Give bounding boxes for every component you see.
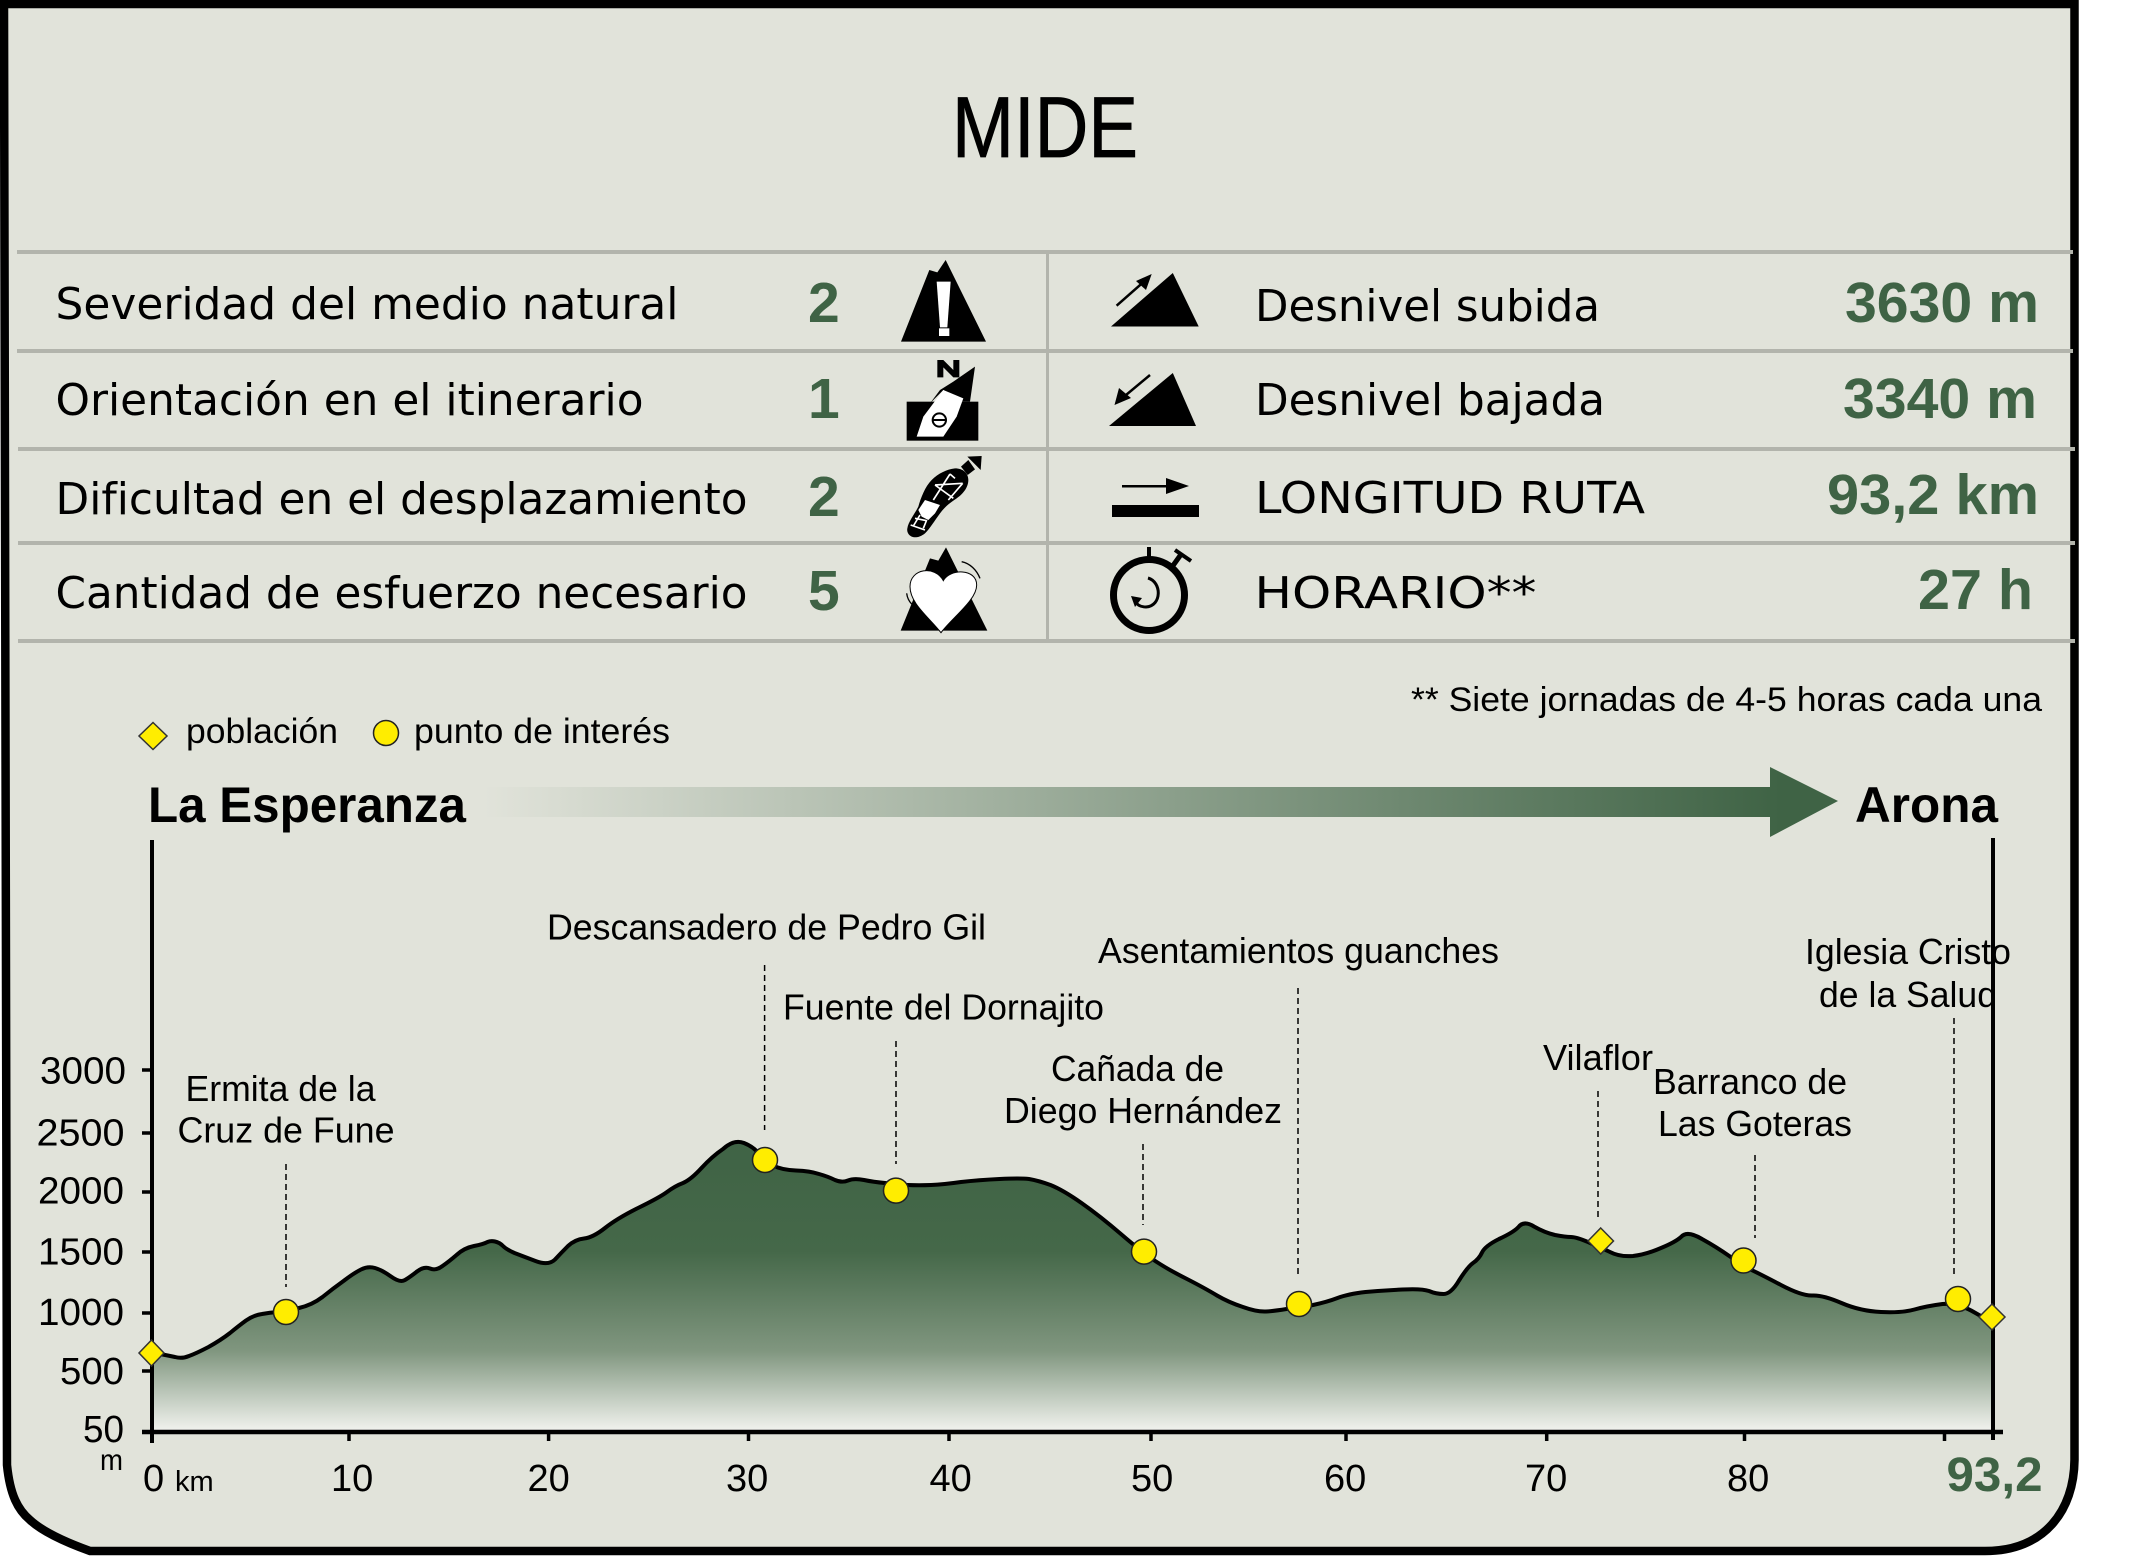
chart: elevation profile	[36, 838, 2042, 1502]
place labels: Fuente del Dornajito	[783, 986, 1104, 1028]
rating label: orientacion: Orientación en el itinerario	[56, 375, 644, 426]
title: MIDE	[952, 80, 1138, 176]
panel: MIDE ratings	[56, 260, 987, 633]
icon: heart on mountain	[901, 547, 987, 633]
y axis labels: m	[100, 1444, 123, 1477]
legend text: población: población	[186, 712, 338, 751]
rating value: cantidad: 5	[808, 559, 840, 623]
arrow: route direction	[471, 767, 1838, 837]
icon: boot sole	[907, 456, 982, 537]
place labels	[178, 906, 2011, 1150]
y axis labels: 2000	[38, 1170, 124, 1212]
panel: route stats	[1109, 271, 2039, 630]
x axis labels: 0	[143, 1458, 164, 1500]
rating label: dificultad: Dificultad en el desplazamiento	[56, 474, 748, 525]
y axis labels: 500	[60, 1351, 124, 1393]
x axis labels: 30	[726, 1458, 768, 1500]
icon: mountain warning	[901, 260, 986, 342]
legend marker: población	[139, 722, 167, 750]
x axis labels: 80	[1727, 1458, 1769, 1500]
legend text: punto de interés: punto de interés	[414, 712, 670, 751]
place labels: Ermita de la	[186, 1068, 376, 1109]
distance total: 93,2	[1946, 1449, 2042, 1502]
x axis labels	[143, 1458, 1769, 1500]
place labels: Iglesia Cristo	[1805, 931, 2011, 972]
stat label: longitud: LONGITUD RUTA	[1255, 473, 1645, 524]
icon: descent	[1109, 373, 1196, 426]
place labels: Asentamientos guanches	[1098, 930, 1499, 971]
axes and ticks	[142, 838, 2003, 1443]
markers: towns	[139, 1228, 2005, 1366]
icon: stopwatch	[1114, 547, 1191, 630]
leader lines	[286, 965, 1954, 1287]
y axis labels: 2500	[36, 1112, 124, 1154]
route end label: Arona	[1855, 777, 1999, 833]
place labels: Vilaflor	[1543, 1037, 1653, 1078]
route start label: La Esperanza	[148, 777, 467, 833]
rating label: cantidad: Cantidad de esfuerzo necesario	[56, 568, 748, 619]
icon: compass	[907, 360, 978, 441]
stat label: desnivel subida: Desnivel subida	[1255, 281, 1600, 332]
rating value: dificultad: 2	[808, 465, 840, 529]
y axis labels: 1500	[38, 1232, 124, 1274]
place labels: de la Salud	[1819, 974, 1997, 1015]
table dividers	[17, 250, 2075, 643]
place labels: Cañada de	[1051, 1048, 1224, 1089]
x axis labels: 60	[1324, 1458, 1366, 1500]
place labels: Cruz de Fune	[178, 1110, 394, 1150]
stat value: ascent: 3630 m	[1845, 271, 2039, 335]
y axis labels: 3000	[40, 1050, 126, 1092]
footnote: ** Siete jornadas de 4-5 horas cada una	[1411, 681, 2042, 719]
place labels: Barranco de	[1653, 1061, 1847, 1102]
x axis labels: 50	[1131, 1458, 1173, 1500]
place labels: Diego Hernández	[1004, 1090, 1282, 1131]
stat value: time: 27 h	[1918, 558, 2033, 622]
y axis labels	[36, 1050, 126, 1477]
y axis labels: 1000	[38, 1292, 124, 1334]
terrain area	[152, 1142, 1993, 1432]
markers: points of interest	[274, 1148, 1970, 1324]
icon: ascent	[1111, 273, 1199, 326]
stat value: distance: 93,2 km	[1827, 463, 2039, 527]
rating value: orientacion: 1	[808, 367, 840, 431]
place labels: Las Goteras	[1658, 1103, 1852, 1144]
x axis labels: 40	[930, 1458, 972, 1500]
x axis labels: km	[175, 1466, 214, 1498]
stat value: descent: 3340 m	[1843, 367, 2037, 431]
place labels: Descansadero de Pedro Gil	[547, 906, 986, 948]
x axis labels: 20	[528, 1458, 570, 1500]
stat label: desnivel bajada: Desnivel bajada	[1255, 375, 1605, 426]
stat label: horario: HORARIO**	[1254, 568, 1536, 619]
x axis labels: 70	[1525, 1458, 1567, 1500]
rating value: severidad: 2	[808, 271, 840, 335]
y axis labels: 50	[83, 1409, 124, 1451]
x axis labels: 10	[331, 1458, 373, 1500]
icon: distance	[1112, 478, 1199, 517]
legend marker: punto de interés	[374, 720, 398, 746]
legend	[139, 712, 670, 751]
rating label: severidad: Severidad del medio natural	[56, 279, 678, 330]
